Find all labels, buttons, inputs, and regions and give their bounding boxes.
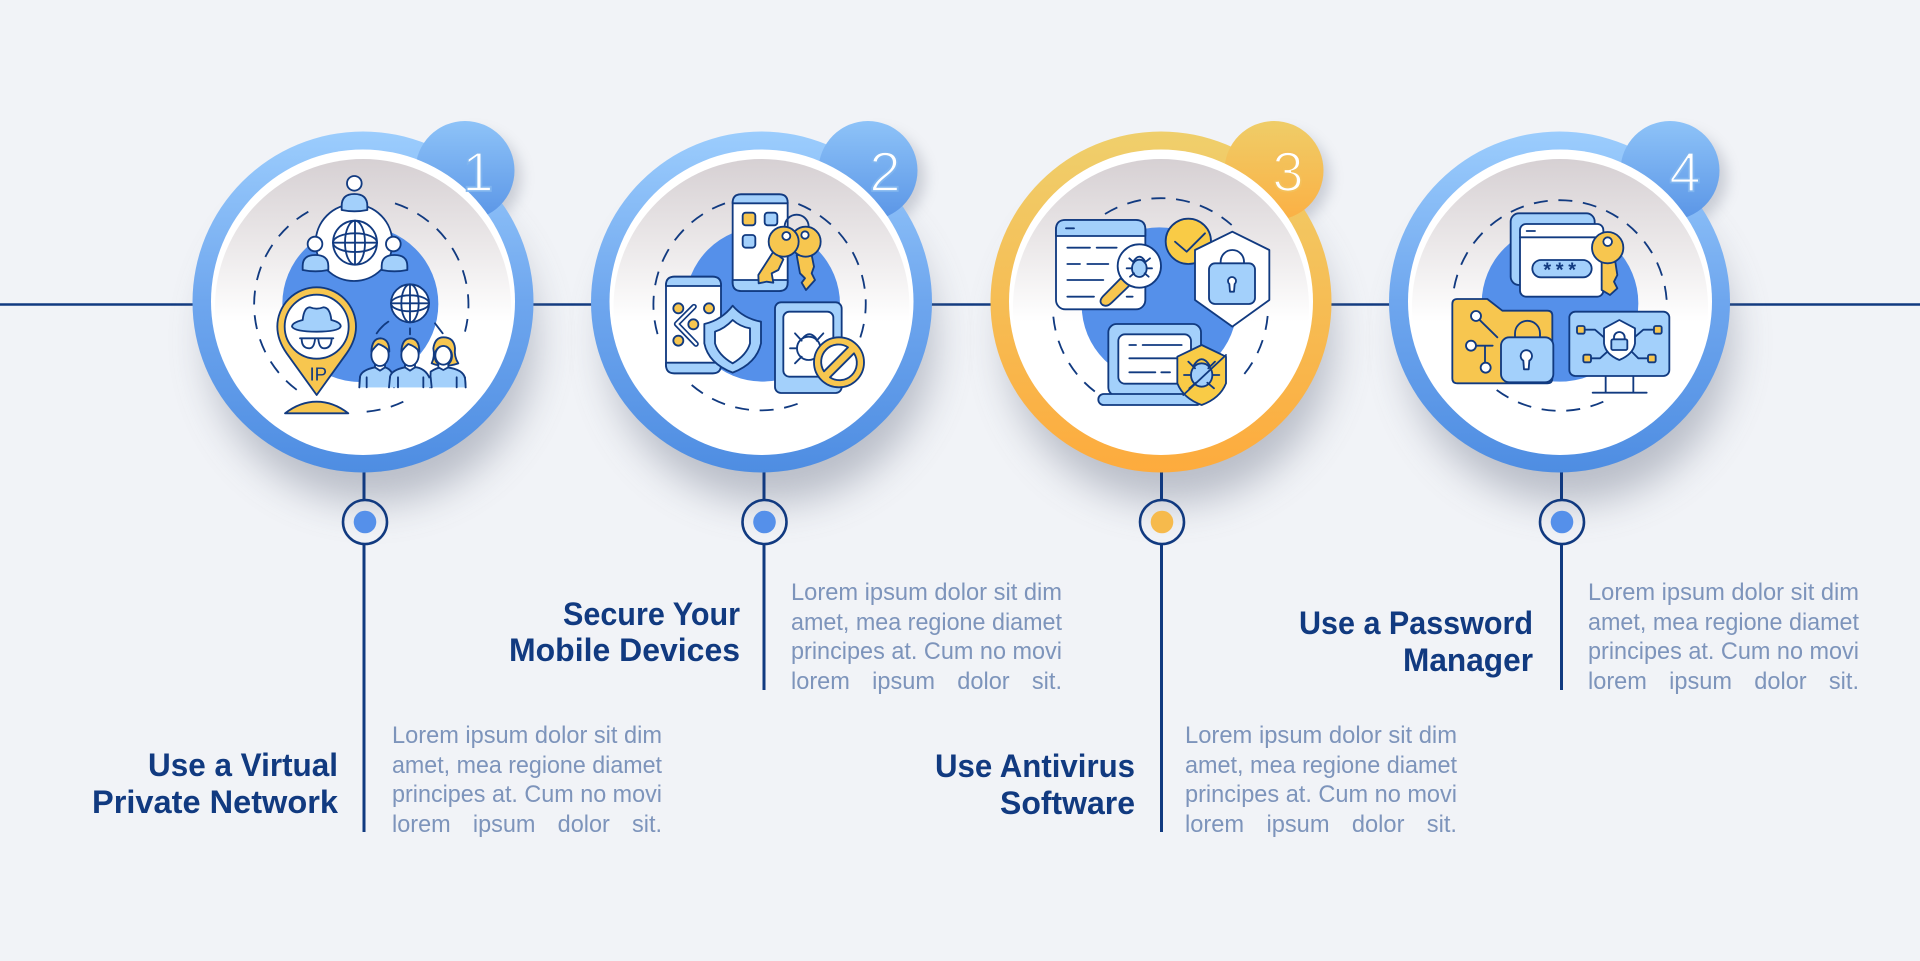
- step 2 circle: [591, 121, 932, 472]
- heading 4: [1299, 605, 1533, 678]
- heading 1: [92, 747, 338, 820]
- shadow under circle 4: [1406, 177, 1732, 503]
- body text 3: [1185, 722, 1457, 838]
- step 3 circle: [990, 121, 1332, 472]
- number 2: 2: [869, 140, 901, 203]
- connector stem 2: [762, 470, 766, 690]
- icon: VPN network: [254, 176, 468, 413]
- body text 3: amet, mea regione diamet: [1185, 752, 1457, 779]
- number 1: 1: [462, 140, 494, 203]
- heading 1: Private Network: [92, 784, 338, 820]
- body text 2: [791, 579, 1062, 695]
- shadow under circle 2: [608, 177, 934, 503]
- body text 4: principes at. Cum no movi: [1588, 638, 1859, 665]
- body text 2: Lorem ipsum dolor sit dim: [791, 579, 1062, 606]
- step 1 circle: [192, 121, 534, 472]
- badge 1: [416, 121, 514, 220]
- heading 3: Software: [1000, 785, 1135, 821]
- heading 1: Use a Virtual: [148, 747, 338, 783]
- body text 3: lorem ipsum dolor sit.: [1185, 811, 1457, 838]
- icon: password manager: ***: [1543, 260, 1581, 282]
- body text 1: Lorem ipsum dolor sit dim: [392, 722, 662, 749]
- step 4 circle: [1389, 121, 1730, 472]
- body text 4: Lorem ipsum dolor sit dim: [1588, 579, 1859, 606]
- node marker 1: [343, 500, 387, 544]
- heading 4: Manager: [1403, 642, 1533, 678]
- icon: mobile security: [653, 194, 866, 410]
- badge 3: [1224, 121, 1324, 220]
- body text 4: [1588, 579, 1859, 695]
- node marker 2: [742, 500, 786, 544]
- heading 2: [509, 596, 740, 668]
- horizontal timeline: [0, 303, 1920, 306]
- badge 4: [1620, 121, 1720, 220]
- connector stem 4: [1560, 470, 1563, 690]
- connector stem 1: [362, 470, 366, 832]
- heading 4: Use a Password: [1299, 605, 1533, 641]
- connector stem 3: [1160, 470, 1163, 832]
- IP label: IP: [310, 364, 327, 385]
- body text 4: lorem ipsum dolor sit.: [1588, 668, 1859, 695]
- heading 3: [935, 748, 1135, 821]
- badge 2: [818, 121, 918, 220]
- shadow under circle 3: [1007, 177, 1333, 503]
- number 3: 3: [1272, 140, 1304, 203]
- heading 2: Secure Your: [563, 596, 740, 632]
- body text 3: principes at. Cum no movi: [1185, 781, 1457, 808]
- body text 2: lorem ipsum dolor sit.: [791, 668, 1062, 695]
- body text 1: [392, 722, 662, 838]
- node marker 3: [1140, 500, 1184, 544]
- body text 1: lorem ipsum dolor sit.: [392, 811, 662, 838]
- icon: antivirus: [1053, 198, 1269, 405]
- body text 4: amet, mea regione diamet: [1588, 609, 1859, 636]
- icon: password manager: [1452, 200, 1669, 411]
- heading 3: Use Antivirus: [935, 748, 1135, 784]
- number 4: 4: [1669, 140, 1701, 203]
- body text 2: principes at. Cum no movi: [791, 638, 1062, 665]
- body text 1: amet, mea regione diamet: [392, 752, 662, 779]
- heading 2: Mobile Devices: [509, 632, 740, 668]
- body text 3: Lorem ipsum dolor sit dim: [1185, 722, 1457, 749]
- body text 2: amet, mea regione diamet: [791, 609, 1062, 636]
- node marker 4: [1540, 500, 1584, 544]
- shadow under circle 1: [209, 177, 535, 503]
- body text 1: principes at. Cum no movi: [392, 781, 662, 808]
